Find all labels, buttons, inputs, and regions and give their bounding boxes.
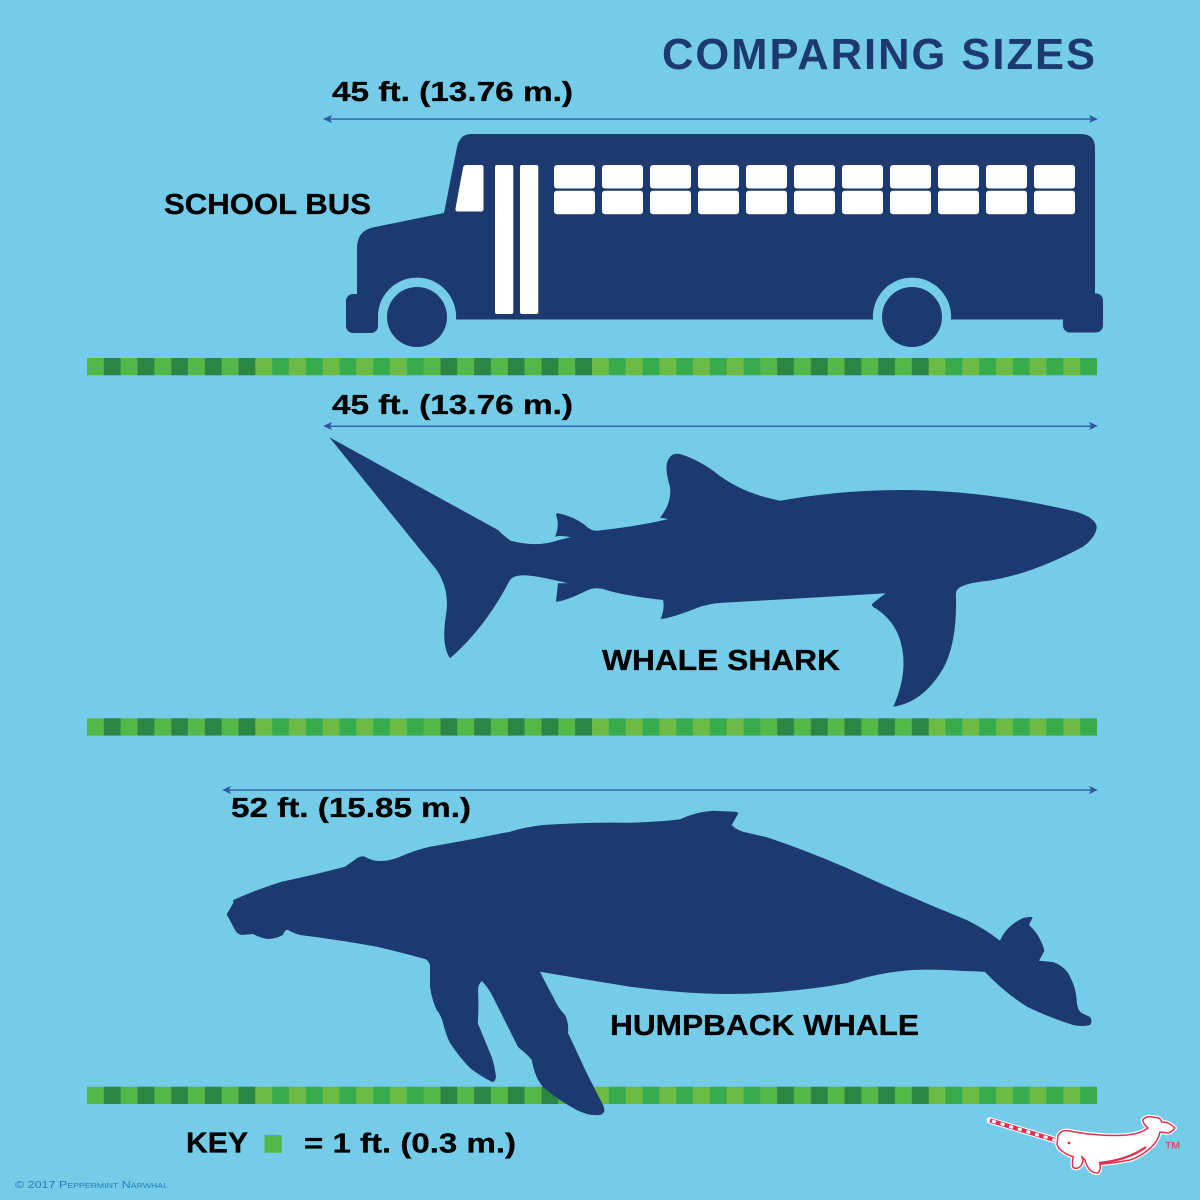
label: school bus: SCHOOL BUS (164, 189, 371, 221)
label: whale shark: WHALE SHARK (602, 645, 840, 677)
label: humpback whale: HUMPBACK WHALE (610, 1010, 919, 1042)
measurement label: humpback whale length: 52 ft. (15.85 m.) (231, 792, 471, 823)
key label: KEY (186, 1128, 248, 1160)
key swatch (264, 1135, 282, 1153)
measurement label: whale shark length: 45 ft. (13.76 m.) (332, 389, 573, 420)
arrow: school bus length (323, 115, 1098, 123)
key value: = 1 ft. (0.3 m.) (304, 1128, 516, 1158)
ground strip: whale shark (87, 718, 1097, 736)
ground strip: school bus (87, 358, 1097, 375)
legend key (186, 1128, 516, 1160)
measurement label: school bus length: 45 ft. (13.76 m.) (332, 76, 573, 107)
trademark: TM (1165, 1140, 1180, 1152)
icon: humpback whale silhouette (227, 811, 1091, 1115)
icon: narwhal logo (990, 1117, 1180, 1173)
ground strip: humpback whale (87, 1087, 1097, 1104)
icon: whale shark silhouette (329, 437, 1097, 707)
arrow: whale shark length (323, 422, 1098, 430)
copyright: © 2017 Peppermint Narwhal (15, 1180, 168, 1191)
title: COMPARING SIZES (662, 31, 1095, 79)
arrow: humpback whale length (222, 786, 1098, 794)
icon: school bus silhouette (346, 134, 1103, 347)
